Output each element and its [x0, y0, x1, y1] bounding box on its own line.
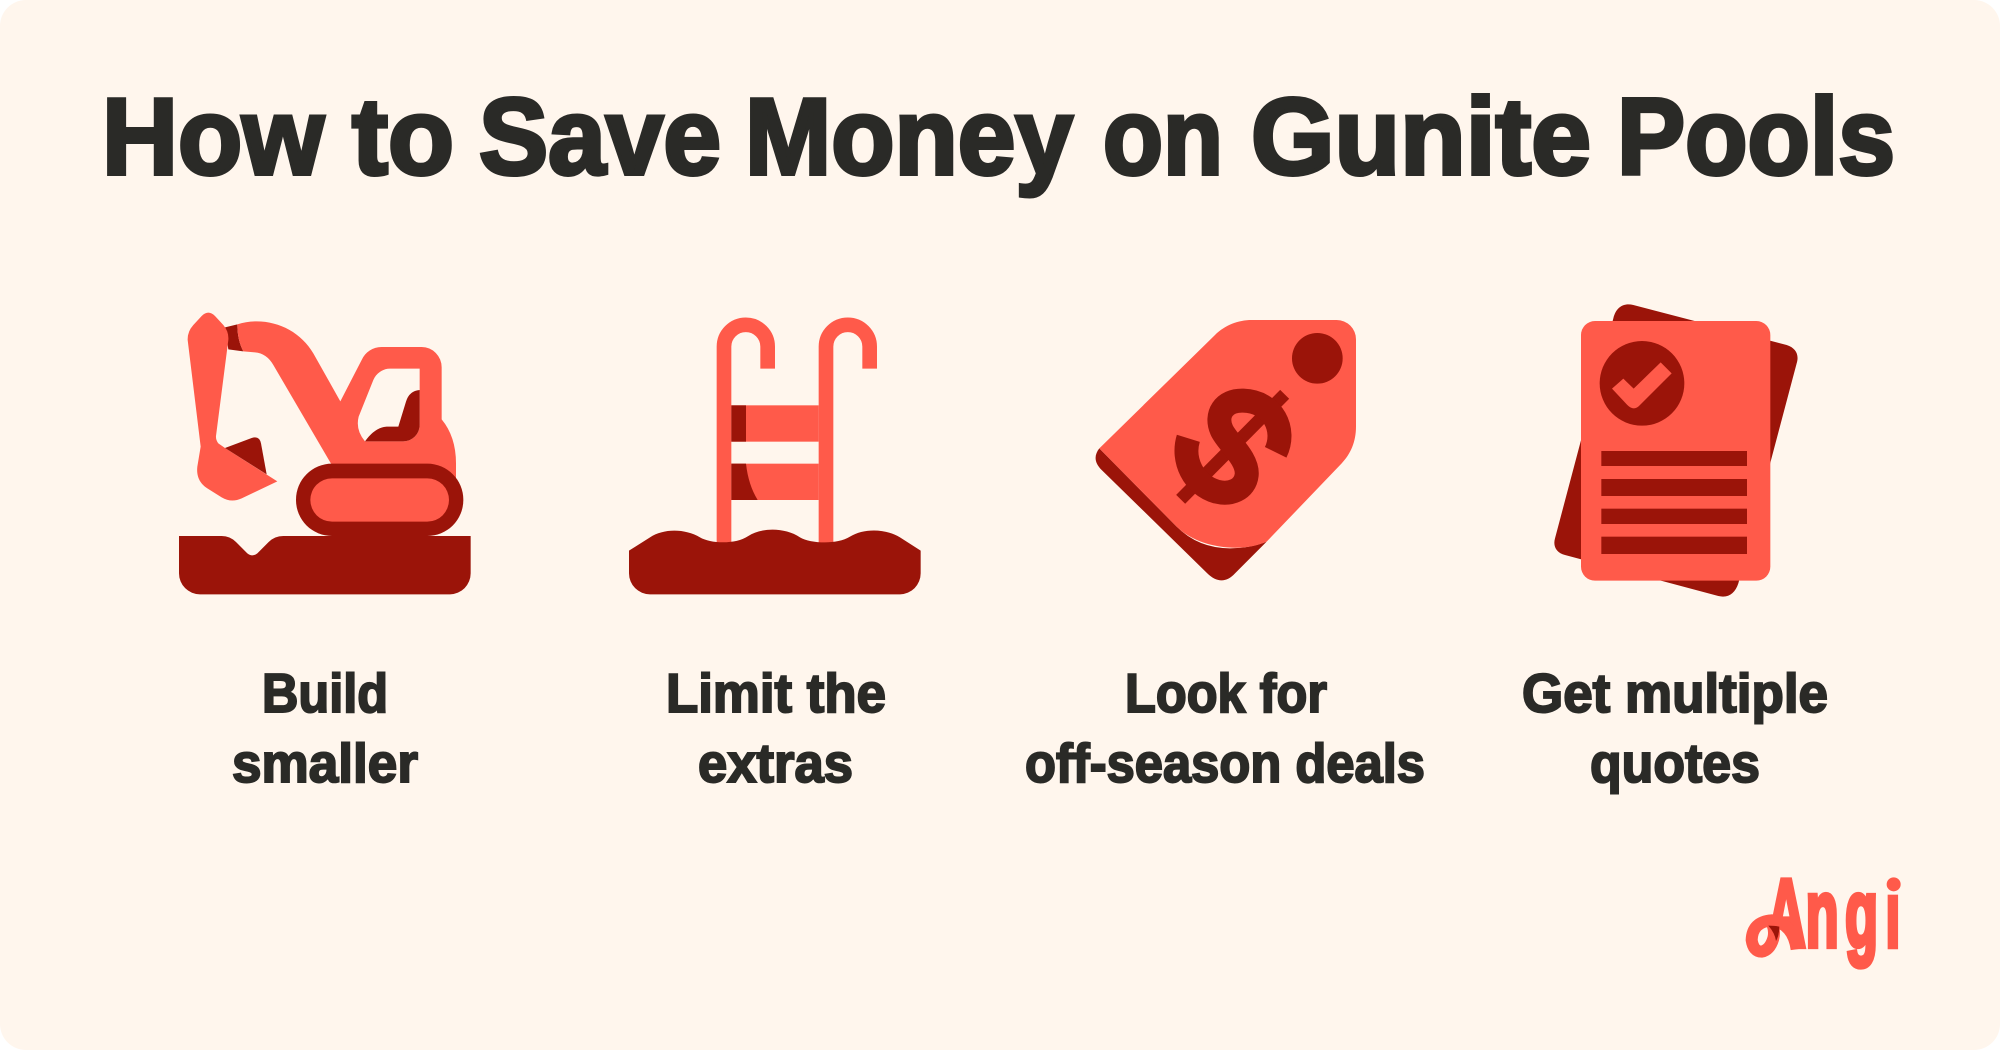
label: look for off-season deals: off-season deals — [1025, 732, 1425, 794]
label: limit the extras: extras — [698, 732, 853, 794]
label: build smaller — [232, 662, 418, 794]
title: Money — [745, 76, 1073, 198]
logo: Angi: Angi — [1767, 859, 1900, 968]
label: limit the extras — [666, 662, 886, 794]
label: get multiple quotes: quotes — [1590, 732, 1760, 794]
title: Gunite — [1251, 76, 1591, 198]
title: How — [102, 76, 324, 198]
title: on — [1103, 76, 1223, 198]
label: look for off-season deals — [1025, 662, 1425, 794]
label: get multiple quotes: Get multiple — [1522, 662, 1828, 724]
title: Save — [479, 76, 721, 198]
icon: excavator — [179, 313, 471, 594]
title: to — [352, 76, 454, 198]
label: limit the extras: Limit the — [666, 662, 886, 724]
icon: price tag — [1096, 320, 1356, 580]
icon: pool ladder — [629, 325, 921, 594]
label: build smaller: smaller — [232, 732, 418, 794]
icon: documents with checkmark — [1554, 304, 1798, 597]
title: Pools — [1617, 76, 1895, 198]
label: look for off-season deals: Look for — [1125, 662, 1327, 724]
label: build smaller: Build — [262, 662, 388, 724]
title — [102, 76, 1895, 198]
label: get multiple quotes — [1522, 662, 1828, 794]
